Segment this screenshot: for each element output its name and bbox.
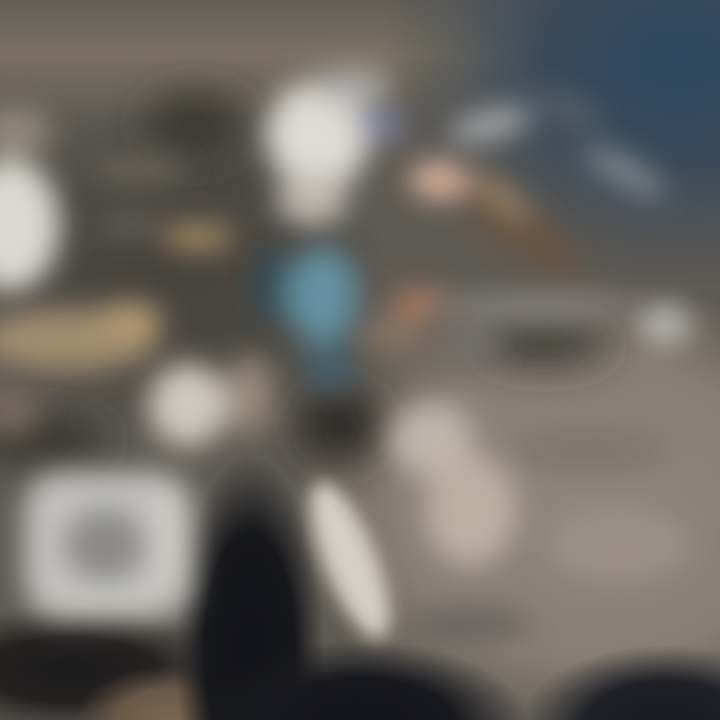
- dark central shapes: [0, 93, 610, 464]
- white diagonal form: [294, 472, 406, 648]
- grey streaks: [446, 100, 534, 150]
- lower scene: bucket, beige forms: [0, 355, 690, 641]
- beige cloth: [390, 402, 474, 478]
- left white: [0, 159, 60, 291]
- white form: [266, 80, 370, 190]
- white bucket: [24, 472, 192, 618]
- peach accent: [410, 161, 466, 199]
- tan streak: [162, 224, 234, 250]
- brown streak: [440, 160, 590, 290]
- upper scene: white cloth, peach and brown streak: [0, 67, 671, 291]
- middle scene: blue-teal object, tan area, grey band: [0, 247, 691, 391]
